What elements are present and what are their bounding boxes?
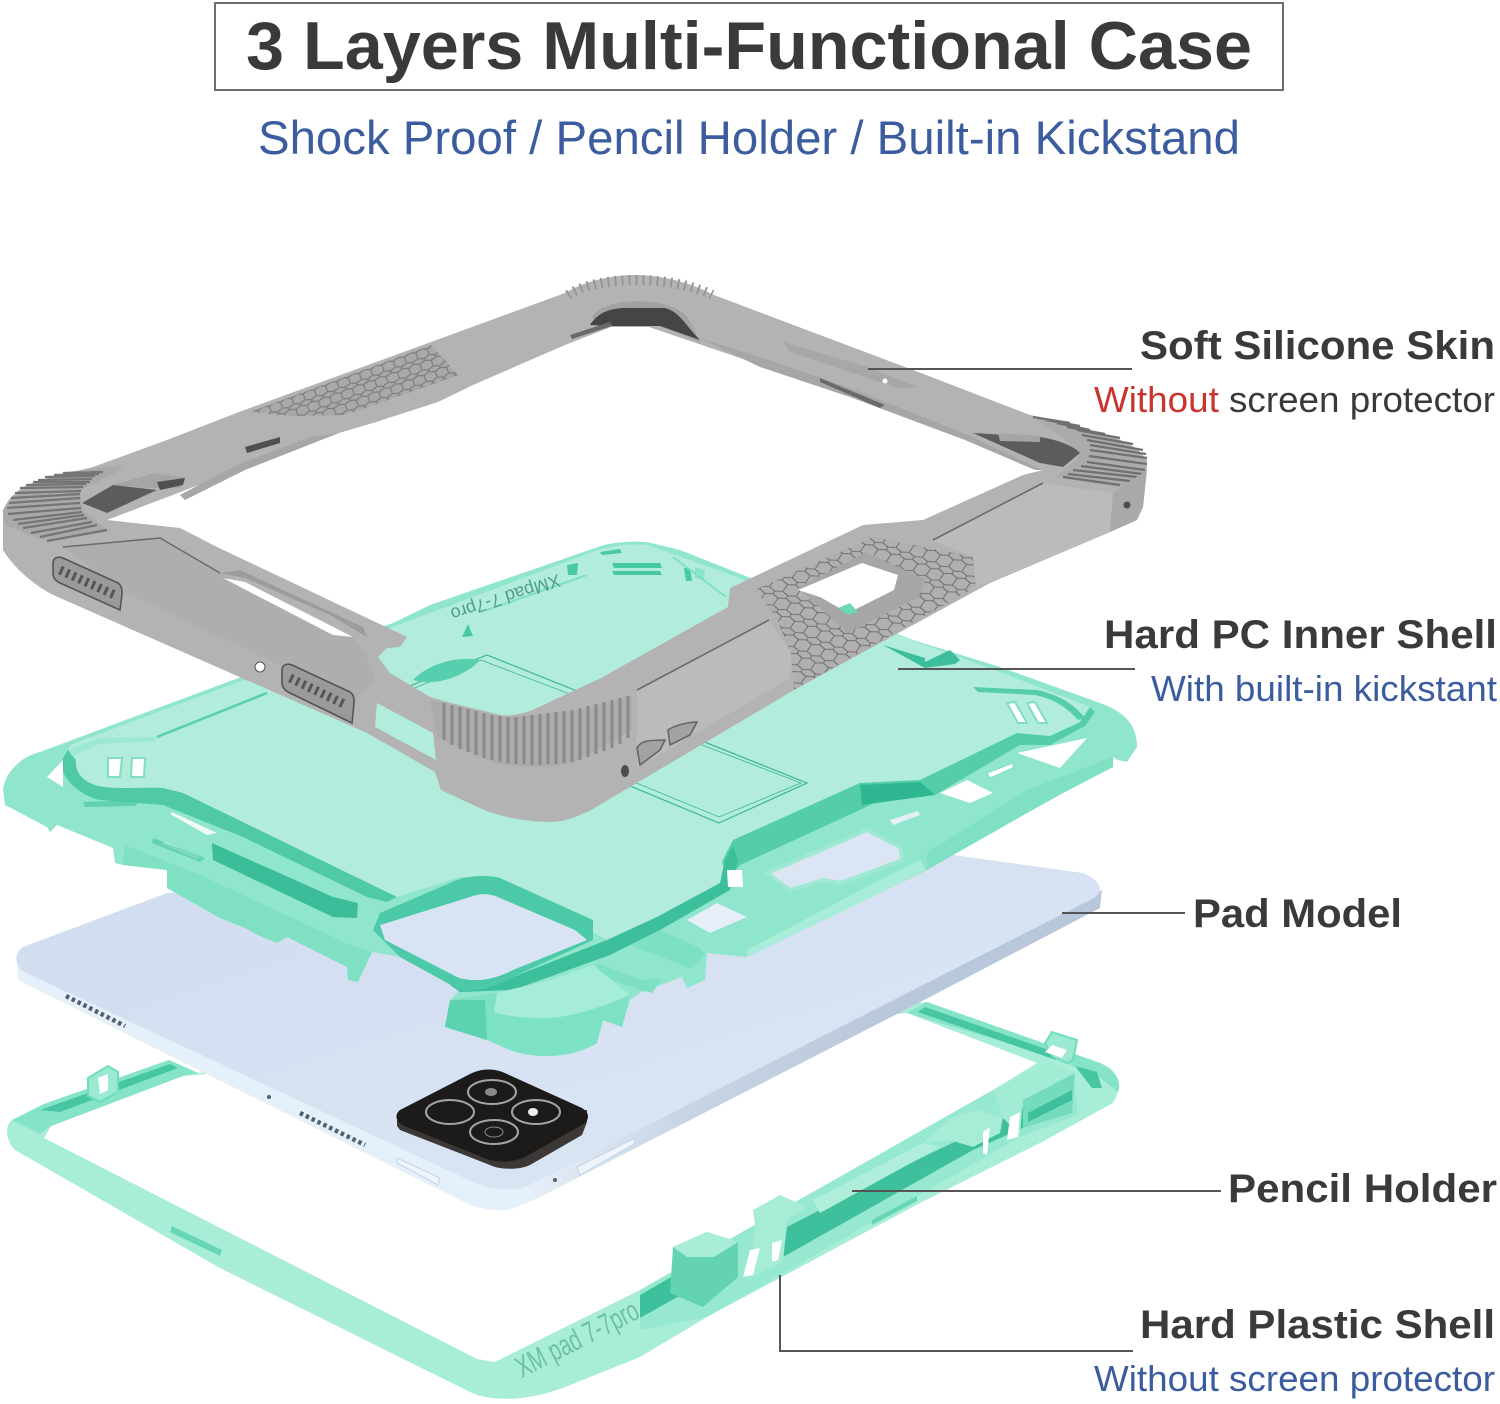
bottom plate band <box>450 845 738 992</box>
raised line top-left <box>157 693 267 737</box>
camera cutout with ring <box>373 876 593 991</box>
callout: soft silicone skin <box>868 324 1495 420</box>
hoop tabs <box>88 1032 1077 1102</box>
ribbed corner bottom <box>430 695 632 767</box>
side buttons <box>397 1138 635 1185</box>
pencil holder bumps <box>670 1232 738 1307</box>
callout: hard plastic shell <box>780 1275 1495 1399</box>
ribbed corner left <box>3 465 123 541</box>
upper bar lower lip <box>180 338 1043 500</box>
corner recess dark left and right <box>82 433 1080 513</box>
edge slots <box>170 1196 917 1256</box>
callout: hard PC inner shell: Hard PC Inner Shell <box>1104 613 1497 657</box>
callout: soft silicone skin: Without screen protector <box>1094 379 1495 420</box>
hex grip: top <box>250 345 458 416</box>
lower-right tab strip highlights <box>927 757 1113 870</box>
callout: hard plastic shell: Without screen protector <box>1094 1358 1495 1399</box>
plastic shell rim, left and right <box>12 1002 1119 1134</box>
callout: pencil holder: Pencil Holder <box>1228 1167 1497 1211</box>
magnet strip <box>883 645 960 668</box>
bar dark slots <box>570 322 885 408</box>
speaker grilles <box>53 557 354 723</box>
upper right ridge <box>973 687 1085 720</box>
ribbed corner right <box>1030 415 1147 487</box>
layer: hard plastic shell (bottom frame) <box>7 1002 1119 1399</box>
tab details <box>597 930 705 993</box>
hex grip: bottom <box>755 537 976 690</box>
callout: hard PC inner shell <box>898 613 1497 709</box>
port opening <box>375 703 436 760</box>
side cutouts <box>767 830 903 890</box>
lower-left rim shading <box>123 845 372 982</box>
ribbed corner top <box>568 280 712 295</box>
kickstand outline <box>400 655 807 823</box>
lower-right bar shading <box>637 483 1113 768</box>
pencil holder channel <box>640 1073 1078 1330</box>
callout: hard PC inner shell: With built-in kickstant <box>1151 668 1497 709</box>
left corner hole <box>47 760 63 787</box>
layer: hard PC inner shell <box>3 542 1137 1056</box>
side slot <box>220 570 367 637</box>
end face <box>1110 470 1147 532</box>
side-button slot top bar <box>783 342 918 388</box>
callout: pad model: Pad Model <box>1193 892 1402 936</box>
printed model text: XM pad 7-7pro <box>510 1294 644 1384</box>
speaker grilles <box>66 996 557 1182</box>
subtitle: Shock Proof / Pencil Holder / Built-in Kickstand <box>258 111 1240 164</box>
callout: soft silicone skin: Soft Silicone Skin <box>1140 324 1495 368</box>
camera module <box>396 1070 588 1169</box>
camera hole in grip <box>798 552 926 633</box>
left lobe ridge <box>61 750 397 902</box>
holes and buttons <box>255 662 265 672</box>
main plate <box>62 544 1090 940</box>
bottom corner lobe <box>445 965 630 1056</box>
title box <box>215 3 1283 90</box>
top corner recess <box>592 301 700 342</box>
dark channel left <box>212 843 358 918</box>
dark channel right <box>722 707 1095 880</box>
layer: pad model (tablet) <box>16 838 1102 1210</box>
lower-left bar panel <box>63 538 375 700</box>
pencil holder slots <box>743 1112 1020 1277</box>
top corner details <box>462 549 692 637</box>
title: 3 Layers Multi-Functional Case <box>246 8 1252 84</box>
layer: soft silicone skin (grey frame) <box>3 275 1147 822</box>
printed model text: XMpad 7-7pro <box>448 570 563 624</box>
lobe slots <box>108 702 1047 777</box>
callout: hard plastic shell: Hard Plastic Shell <box>1140 1303 1495 1347</box>
